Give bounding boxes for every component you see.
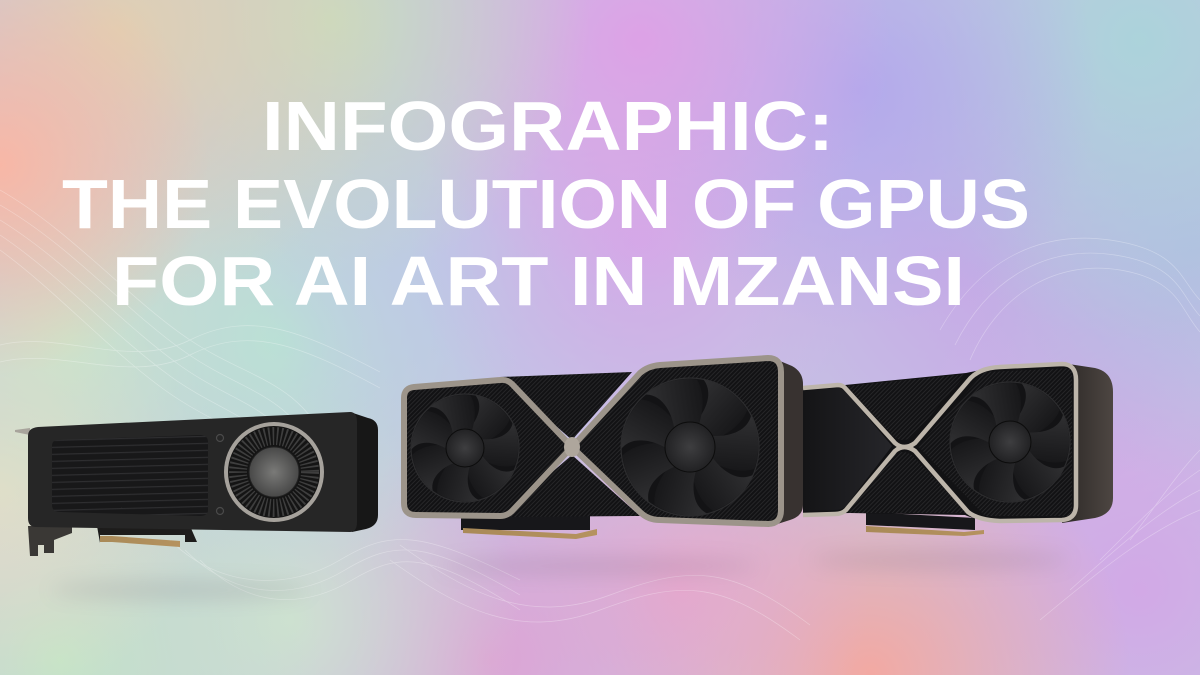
central ribbed panels (500, 372, 632, 440)
left shroud with metal frame (404, 380, 572, 516)
card body (28, 412, 357, 532)
left panel (803, 388, 892, 511)
fan (940, 367, 1087, 516)
metal X frame (803, 364, 1076, 521)
left fan (402, 380, 534, 515)
title: INFOGRAPHIC: (262, 87, 834, 165)
PCIe connector (97, 526, 197, 547)
GPU 1: blower card, left (15, 412, 378, 556)
small logos (216, 434, 224, 514)
ribbed panels (847, 374, 966, 440)
title: FOR AI ART IN MZANSI (112, 242, 965, 320)
PCIe connector (461, 516, 597, 539)
right shroud with metal frame (572, 358, 781, 524)
vent panel (52, 435, 208, 516)
X junction (564, 437, 580, 457)
right fan (609, 360, 778, 532)
GPU 2: dual-fan card, centre (402, 356, 803, 539)
PCIe connector (866, 512, 984, 536)
title: THE EVOLUTION OF GPUS (62, 165, 1030, 243)
side wall (350, 412, 378, 532)
bracket (15, 428, 72, 556)
GPU 3: single-fan card, right (803, 363, 1113, 536)
side wall (768, 356, 803, 527)
title (62, 87, 1030, 320)
blower fan (224, 422, 324, 522)
decorative wave lines (0, 190, 1200, 640)
card face (803, 363, 1078, 521)
side wall (1062, 363, 1113, 523)
GPU shadows (50, 552, 1070, 598)
